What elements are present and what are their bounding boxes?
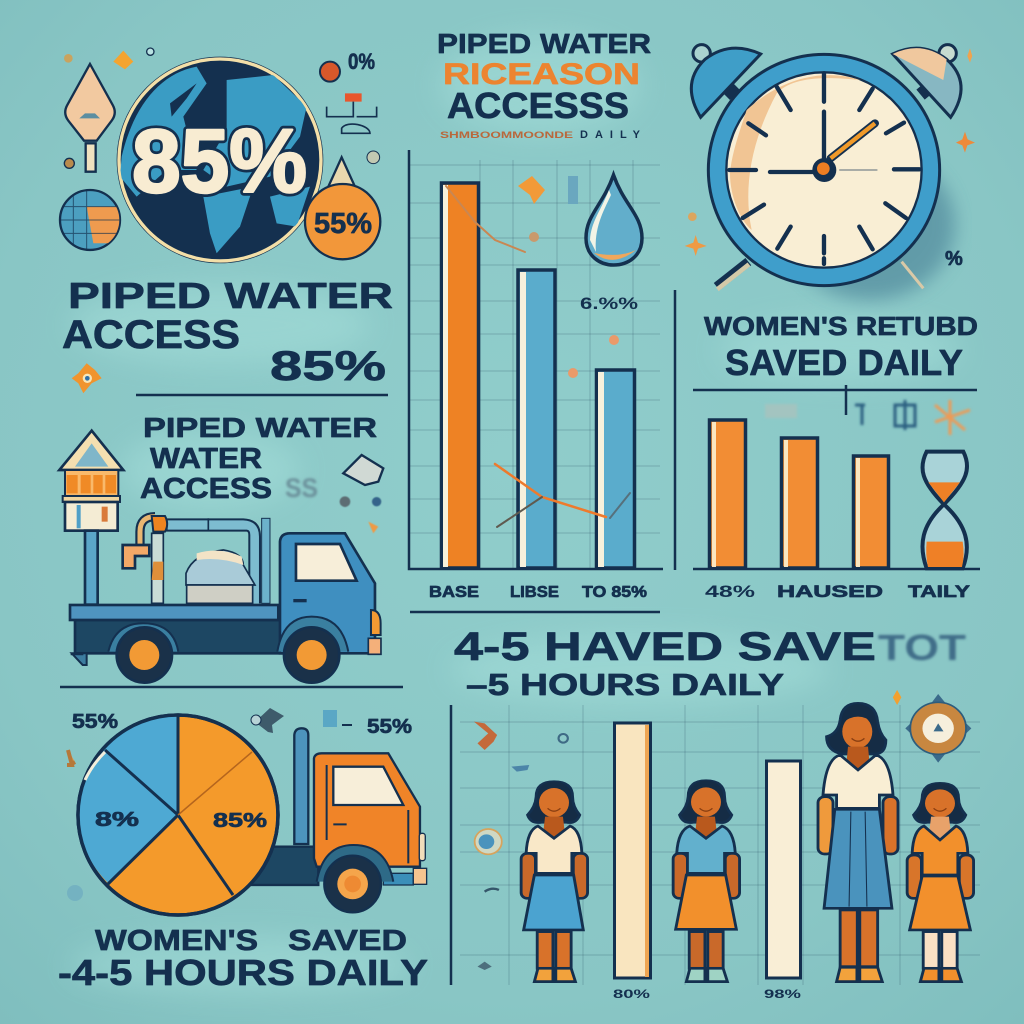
panel: pie chart with orange truck [67,708,427,915]
chart: center bar chart [429,175,647,601]
heading: 4-5 hours saved [454,625,966,702]
trend lines [446,186,630,527]
figure: girl 2 [673,781,740,982]
x labels [705,582,971,601]
blurred glyph row [765,400,970,435]
heading: 4-5 hours saved: TOT [878,627,966,668]
small markers [518,176,619,378]
icon: compass badge [893,690,971,763]
icon: water pin [65,64,115,172]
icon: water drop [586,175,642,265]
icon: orange truck [250,728,427,912]
x labels: HAUSED [777,582,883,601]
truck body [70,533,381,683]
bar label: 80% [613,987,650,1001]
small markers [474,722,568,970]
heading: center title block: ACCESSS [447,85,629,126]
figure: girl 1 [521,782,588,982]
heading: women's saved 4-5 hours daily: SAVED [288,925,407,957]
text: piped water water access: PIPED WATER [143,412,377,443]
label: small percent: 6.%% [580,294,638,313]
x labels [429,584,647,601]
panel: alarm clock [685,45,975,300]
text: piped water water access: SS [285,473,318,503]
icon: small map globe [60,190,120,250]
x labels: TO 85% [582,584,647,601]
icon: orange 55% badge [305,157,380,259]
icon: globe with 85% [117,57,323,263]
icon: globe with 85%: 85% [132,112,307,212]
text: piped water water access [140,412,377,505]
small markers [67,708,352,901]
x labels: 48% [705,582,755,601]
heading: piped water access 85%: PIPED WATER [68,275,393,316]
figure: girl 4 [907,783,974,982]
sparkles [685,48,975,256]
text: piped water water access: WATER [150,443,262,475]
decorative small icons around globe [64,48,380,393]
heading: piped water access 85%: ACCESS [62,313,240,357]
heading: 4-5 hours saved: –5 HOURS DAILY [466,667,784,702]
bars [442,183,634,568]
heading: center title block: SHMBOOMMOONDE [440,130,573,140]
pipes and tank [123,516,270,603]
heading: center title block: PIPED WATER [437,28,651,59]
heading: women's saved 4-5 hours daily: WOMEN'S [95,925,258,957]
pie label: 85%: 85% [213,810,267,832]
heading: center title block: DAILY [580,129,641,141]
heading: women's saved daily: WOMEN'S RE [704,311,897,341]
heading: center title block [437,28,651,141]
text: piped water water access: ACCESS [140,473,272,505]
icon: globe with 85%: 85% [132,112,307,212]
label: right 55%: 55% [367,716,412,738]
heading: 4-5 hours saved: 4-5 HAVED SAVE [454,625,876,669]
bar label: 98% [764,987,801,1001]
label: left 55%: 55% [72,711,118,733]
icon: hourglass [922,452,967,568]
clock ticks and hands [729,73,919,264]
text: top-right percent: 0% [348,49,375,74]
heading: women's saved daily: SAVED DAILY [725,342,963,383]
panel: water truck with house and pipe [59,412,383,683]
icon: house tower [59,431,123,605]
heading: piped water access 85% [62,275,393,389]
chart: right orange bars [705,400,971,601]
x labels: LIBSE [510,584,559,601]
heading: women's saved 4-5 hours daily: -4-5 HOURS DAILY [58,952,428,993]
x labels: TAILY [908,582,971,601]
pie labels: 8% [95,809,139,831]
small scattered icon [340,455,383,533]
heading: piped water access 85%: 85% [270,342,386,389]
heading: women's saved 4-5 hours daily [58,925,428,993]
heading: women's saved daily [704,311,978,383]
heading: center title block: RICEASON [443,58,640,91]
icon: orange 55% badge: 55% [314,208,372,240]
text: percent mark: % [945,248,963,270]
panel: global access globe [60,48,380,393]
cream bars [614,723,800,978]
figure: tall woman [818,703,898,982]
icon: clock face [708,54,940,286]
chart: cream bars with figures [474,690,974,1001]
chart: pie [78,715,278,915]
icon: bells [691,45,961,289]
x labels: BASE [429,584,479,601]
heading: women's saved daily: TUBD [896,311,978,341]
